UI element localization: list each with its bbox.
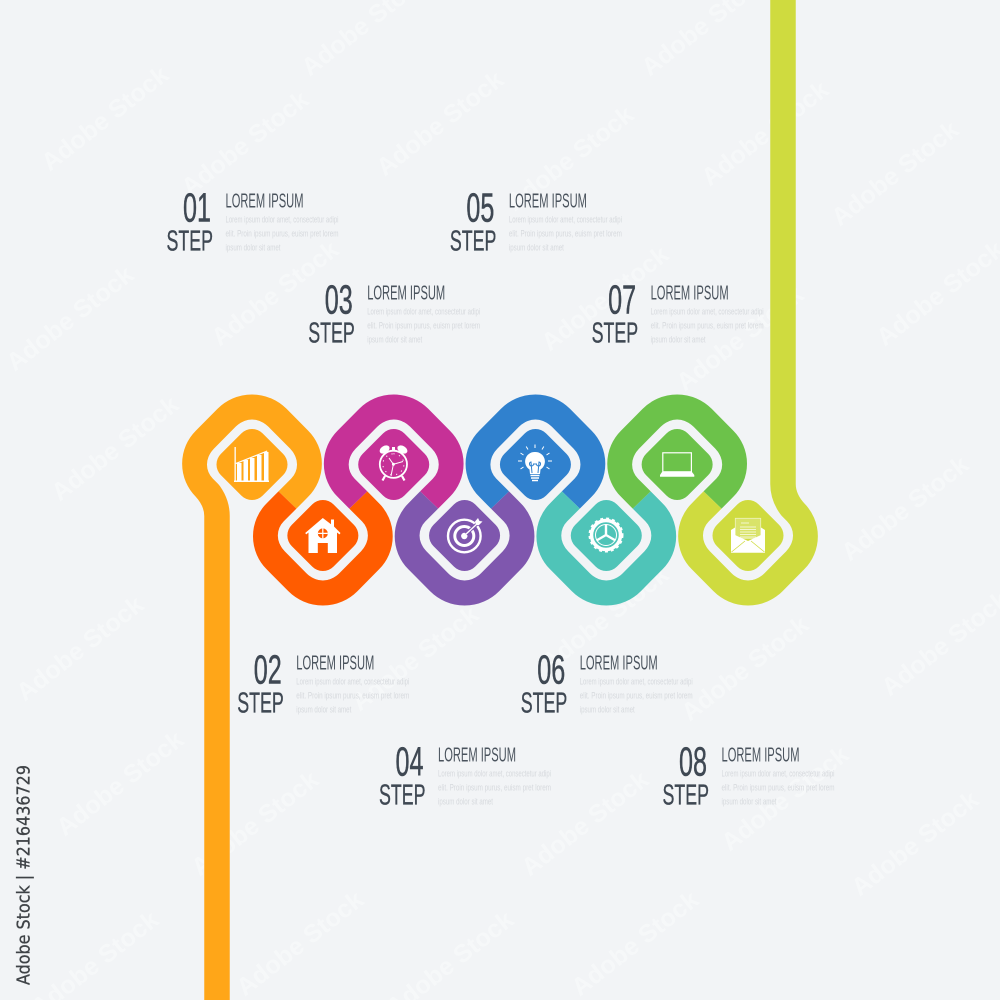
faint diagonal stock overlay text: Adobe Stock bbox=[536, 561, 674, 677]
step 02 text: STEP bbox=[237, 688, 284, 720]
step 01 text: ipsum dolor sit amet bbox=[226, 242, 281, 254]
step 03 text: LOREM IPSUM bbox=[367, 282, 445, 304]
step 04 text: elit. Proin ipsum purus, euism pret lorem bbox=[438, 782, 551, 794]
icon: house bbox=[305, 518, 340, 553]
step 04 text: STEP bbox=[379, 780, 426, 812]
step 08 text: elit. Proin ipsum purus, euism pret lorem bbox=[722, 782, 835, 794]
step 04 text: ipsum dolor sit amet bbox=[438, 796, 493, 808]
step 02 text: elit. Proin ipsum purus, euism pret lorem bbox=[296, 690, 409, 702]
step 01 text: LOREM IPSUM bbox=[226, 190, 304, 212]
step 02 text: Lorem ipsum dolor amet, consectetur adipi bbox=[296, 676, 409, 688]
step 04 text: LOREM IPSUM bbox=[438, 744, 516, 766]
step 05 text: Lorem ipsum dolor amet, consectetur adipi bbox=[509, 214, 622, 226]
ribbon segment: step 2 orange bbox=[266, 500, 380, 593]
step 07 text: STEP bbox=[592, 318, 638, 350]
badge: step 3 clock bbox=[340, 411, 447, 518]
step 07 text bbox=[592, 276, 764, 350]
step 03 text: 03 bbox=[325, 276, 353, 322]
faint diagonal stock overlay text: Adobe Stock bbox=[671, 281, 809, 397]
badge: step 1 chart bbox=[199, 411, 305, 518]
icon: light bulb bbox=[518, 444, 552, 480]
step 03 text bbox=[308, 276, 480, 350]
icon: bar chart bbox=[234, 447, 269, 482]
step 04 text bbox=[379, 738, 551, 812]
step 01 text: STEP bbox=[166, 226, 213, 258]
faint diagonal stock overlay text: Adobe Stock bbox=[176, 86, 314, 202]
step 05 text bbox=[450, 184, 622, 258]
step 01 text: Lorem ipsum dolor amet, consectetur adipi bbox=[226, 214, 338, 226]
step 03 text: Lorem ipsum dolor amet, consectetur adipi bbox=[367, 306, 480, 318]
step 06 text: STEP bbox=[521, 688, 567, 720]
step 05 text: STEP bbox=[450, 226, 496, 258]
faint diagonal stock overlay text: Adobe Stock bbox=[231, 886, 369, 1000]
step 02 text: LOREM IPSUM bbox=[296, 652, 374, 674]
ribbon segment: step 6 teal bbox=[549, 500, 663, 593]
step 01 text: elit. Proin ipsum purus, euism pret lorem bbox=[226, 228, 339, 240]
step 08 text: Lorem ipsum dolor amet, consectetur adipi bbox=[722, 768, 834, 780]
ribbon: continuous eight-colour path bbox=[195, 0, 805, 1000]
faint diagonal stock overlay text: Adobe Stock bbox=[11, 591, 149, 707]
diamond badges with icons bbox=[199, 411, 801, 589]
badge: step 4 target bbox=[411, 482, 518, 589]
icon: gear bbox=[590, 519, 622, 551]
step 07 text: ipsum dolor sit amet bbox=[651, 334, 706, 346]
badge: step 8 envelope bbox=[695, 482, 801, 589]
step 06 text: LOREM IPSUM bbox=[580, 652, 658, 674]
step 05 text: elit. Proin ipsum purus, euism pret lorem bbox=[509, 228, 622, 240]
step 07 text: Lorem ipsum dolor amet, consectetur adipi bbox=[651, 306, 764, 318]
step 07 text: 07 bbox=[608, 276, 636, 322]
faint diagonal stock overlay text: Adobe Stock bbox=[186, 766, 324, 882]
step 06 text: 06 bbox=[537, 646, 565, 692]
faint diagonal stock overlay text: Adobe Stock bbox=[501, 101, 639, 217]
icon: laptop bbox=[660, 453, 694, 477]
faint diagonal stock overlay text: Adobe Stock bbox=[566, 886, 704, 1000]
ribbon segment: step 5 blue bbox=[478, 407, 593, 500]
faint diagonal stock overlay text: Adobe Stock bbox=[516, 766, 654, 882]
ribbon segment: step 7 green bbox=[620, 407, 734, 500]
ribbon segment: step 3 magenta bbox=[337, 407, 451, 500]
step 08 text bbox=[662, 738, 835, 812]
badge: step 5 light bulb bbox=[482, 411, 589, 518]
step 05 text: LOREM IPSUM bbox=[509, 190, 587, 212]
step 04 text: 04 bbox=[396, 738, 424, 784]
icon: alarm clock bbox=[378, 444, 409, 480]
step 07 text: elit. Proin ipsum purus, euism pret lorem bbox=[651, 320, 764, 332]
vertical image id caption: Adobe Stock | #216436729 bbox=[14, 765, 34, 985]
step 02 text: ipsum dolor sit amet bbox=[296, 704, 352, 716]
badge: step 6 gear bbox=[553, 482, 660, 589]
step 04 text: Lorem ipsum dolor amet, consectetur adipi bbox=[438, 768, 551, 780]
faint diagonal stock overlay text: Adobe Stock bbox=[346, 601, 484, 717]
icon: envelope with letter bbox=[731, 518, 765, 553]
step 06 text: ipsum dolor sit amet bbox=[580, 704, 635, 716]
step 06 text: Lorem ipsum dolor amet, consectetur adipi bbox=[580, 676, 693, 688]
step 01 text: 01 bbox=[183, 184, 211, 230]
faint diagonal stock overlay text: Adobe Stock bbox=[36, 61, 174, 177]
ribbon segment: step 8 lime bbox=[691, 0, 805, 593]
faint diagonal stock overlay text: Adobe Stock bbox=[846, 786, 984, 902]
step 07 text: LOREM IPSUM bbox=[651, 282, 729, 304]
step 02 text bbox=[237, 646, 409, 720]
faint diagonal stock overlay text: Adobe Stock bbox=[836, 451, 974, 567]
badge: step 7 laptop bbox=[624, 411, 730, 518]
step 08 text: STEP bbox=[662, 780, 709, 812]
step 08 text: ipsum dolor sit amet bbox=[722, 796, 777, 808]
step 08 text: 08 bbox=[679, 738, 707, 784]
badge: step 2 house bbox=[270, 482, 376, 589]
icon: target with arrow bbox=[448, 518, 482, 552]
step 08 text: LOREM IPSUM bbox=[722, 744, 800, 766]
faint diagonal stock overlay text: Adobe Stock bbox=[696, 76, 834, 192]
step 06 text: elit. Proin ipsum purus, euism pret lorem bbox=[580, 690, 693, 702]
step 03 text: elit. Proin ipsum purus, euism pret lorem bbox=[367, 320, 480, 332]
faint diagonal stock overlay text: Adobe Stock bbox=[826, 116, 964, 232]
step 02 text: 02 bbox=[254, 646, 282, 692]
step 03 text: ipsum dolor sit amet bbox=[367, 334, 422, 346]
step 03 text: STEP bbox=[308, 318, 355, 350]
ribbon segment: step 1 yellow bbox=[195, 407, 309, 1000]
faint diagonal stock overlay text: Adobe Stock bbox=[371, 66, 509, 182]
faint diagonal stock overlay text: Adobe Stock bbox=[716, 741, 854, 857]
step 06 text bbox=[521, 646, 693, 720]
faint diagonal stock overlay text: Adobe Stock bbox=[46, 391, 184, 507]
faint diagonal stock overlay text: Adobe Stock bbox=[676, 611, 814, 727]
faint diagonal stock overlay text: Adobe Stock bbox=[536, 241, 674, 357]
step 05 text: ipsum dolor sit amet bbox=[509, 242, 564, 254]
step 01 text bbox=[166, 184, 339, 258]
step 05 text: 05 bbox=[466, 184, 494, 230]
faint diagonal stock overlay text: Adobe Stock bbox=[51, 726, 189, 842]
ribbon segment: step 4 purple bbox=[407, 500, 522, 593]
faint diagonal stock overlay text: Adobe Stock bbox=[206, 236, 344, 352]
faint diagonal stock overlay text: Adobe Stock bbox=[1, 261, 139, 377]
